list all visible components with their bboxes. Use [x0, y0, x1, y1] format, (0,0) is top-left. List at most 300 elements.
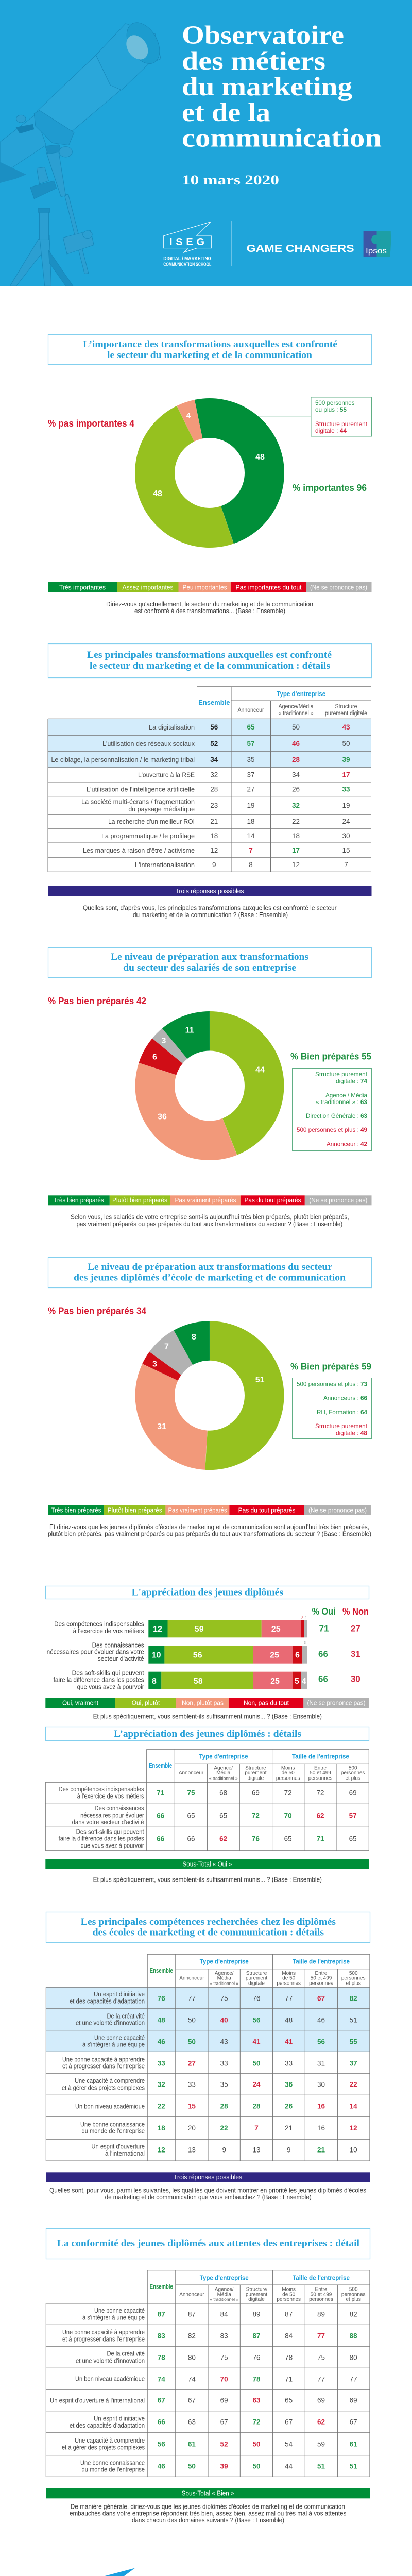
- heading: [48, 335, 372, 365]
- table header: purement: [246, 1976, 267, 1981]
- table rows: 75: [187, 1789, 195, 1797]
- table rows: 68: [219, 1789, 227, 1797]
- table rows: 72: [252, 2418, 261, 2426]
- table rows: 54: [285, 2441, 293, 2448]
- logo: ISEG: [163, 222, 212, 268]
- table header: Média: [217, 1976, 231, 1981]
- table rows: 52: [220, 2441, 228, 2448]
- heading: L’appréciation des jeunes diplômés : détails: [114, 1728, 301, 1739]
- table rows: 50: [292, 723, 300, 731]
- table rows: 20: [188, 2124, 196, 2132]
- callout: Structure purement: [315, 1071, 368, 1078]
- donut chart: 8: [192, 1333, 196, 1342]
- table: [46, 2270, 370, 2477]
- heading: [45, 1727, 369, 1740]
- bar: soft-skills: 25: [270, 1677, 280, 1686]
- table rows: 51: [350, 2462, 357, 2470]
- table rows: 22: [350, 2080, 357, 2088]
- table header: Ensemble: [198, 699, 230, 706]
- table rows: 14: [350, 2102, 357, 2110]
- table rows: 37: [247, 771, 255, 779]
- table rows: à l'international: [105, 2150, 145, 2157]
- table rows: 74: [158, 2375, 165, 2383]
- heading: L'appréciation des jeunes diplômés: [132, 1587, 283, 1598]
- note bar: Sous-Total « Bien »: [182, 2489, 234, 2497]
- legend: Plutôt bien préparés: [112, 1196, 167, 1204]
- table header: personnes: [277, 2297, 301, 2302]
- table rows: 18: [247, 818, 255, 825]
- question text: [48, 1523, 371, 1537]
- title: communication: [182, 124, 382, 152]
- callout: [293, 1069, 372, 1151]
- table rows: 62: [219, 1835, 227, 1842]
- table rows: Un esprit d'initiative: [94, 2415, 145, 2422]
- donut chart: 3: [152, 1360, 157, 1368]
- legend: Oui, vraiment: [62, 1699, 98, 1706]
- table rows: 24: [252, 2080, 261, 2088]
- table rows: 67: [285, 2418, 293, 2426]
- legend: Pas vraiment préparés: [168, 1506, 227, 1514]
- legend: Pas du tout préparés: [238, 1506, 296, 1514]
- table rows: [59, 1786, 357, 1849]
- table rows: 67: [350, 2418, 357, 2426]
- callout: digitale : 44: [315, 427, 347, 434]
- note bar: Trois réponses possibles: [175, 887, 244, 895]
- table header: Entre: [315, 2287, 328, 2293]
- table rows: et des capacités d'adaptation: [70, 2422, 145, 2429]
- table header: Ensemble: [150, 1967, 173, 1974]
- stacked bar chart: [47, 1617, 360, 1690]
- table rows: 78: [285, 2354, 293, 2362]
- table rows: 80: [350, 2354, 357, 2362]
- bar: compétences: à l'exercice de vos métiers: [73, 1627, 144, 1635]
- callout: digitale : 74: [336, 1078, 367, 1085]
- bar: compétences: [54, 1617, 360, 1637]
- table rows: 35: [247, 756, 255, 764]
- table rows: De la créativité: [107, 2350, 145, 2358]
- table rows: 87: [188, 2311, 196, 2318]
- table rows: 50: [252, 2462, 261, 2470]
- table rows: 48: [285, 2016, 293, 2024]
- table rows: 55: [350, 2038, 357, 2045]
- section 8: conformité aux attentes: [46, 2229, 370, 2524]
- table header: de 50: [282, 2292, 296, 2297]
- bar: compétences: 25: [271, 1625, 281, 1634]
- table header: Type d'entreprise: [200, 2274, 249, 2281]
- table rows: et une volonté d'innovation: [76, 2020, 145, 2027]
- legend: [48, 1505, 371, 1515]
- label: importantes: % importantes 96: [293, 483, 367, 493]
- table rows: 67: [220, 2418, 228, 2426]
- table rows: 52: [210, 740, 218, 748]
- table rows: 80: [188, 2354, 196, 2362]
- heading: Le niveau de préparation aux transformations du secteur: [88, 1262, 333, 1273]
- table rows: 65: [219, 1811, 227, 1819]
- table rows: et à progresser dans l'entreprise: [62, 2063, 145, 2070]
- table rows: du monde de l'entreprise: [81, 2128, 145, 2135]
- table rows: 41: [252, 2038, 261, 2045]
- header banner: [0, 0, 412, 286]
- table header: personnes: [277, 1980, 301, 1986]
- legend: Très importantes: [59, 583, 106, 591]
- table rows: 57: [247, 740, 255, 748]
- column head: oui: % Oui: [312, 1606, 336, 1617]
- question text: du marketing et de la communication ? (Base : Ensemble): [133, 911, 288, 919]
- legend: [45, 1698, 369, 1708]
- bar: connaissances: secteur d'activité: [98, 1655, 144, 1663]
- table rows: 65: [349, 1835, 357, 1842]
- title: des métiers: [182, 47, 325, 76]
- table rows: et à gérer des projets complexes: [62, 2084, 145, 2091]
- table rows: et des capacités d'adaptation: [70, 1998, 145, 2005]
- legend: Très bien préparés: [52, 1506, 101, 1514]
- table rows: 72: [252, 1811, 260, 1819]
- legend: Assez importantes: [123, 583, 174, 591]
- table rows: 69: [350, 2397, 357, 2404]
- table rows: 14: [247, 832, 255, 840]
- donut chart: 4: [186, 412, 191, 420]
- donut chart: [133, 1319, 286, 1472]
- table rows: 37: [350, 2059, 357, 2067]
- logo: Game Changers: GAME CHANGERS: [247, 243, 354, 255]
- table rows: Des compétences indispensables: [59, 1786, 144, 1793]
- table header: personnes: [276, 1775, 300, 1781]
- heading: [48, 644, 372, 678]
- bar: soft-skills: 8: [152, 1677, 157, 1686]
- table rows: 17: [342, 771, 350, 779]
- heading: des jeunes diplômés d’école de marketing et de communication: [74, 1273, 346, 1283]
- table rows: à l'exercice de vos métiers: [77, 1793, 144, 1800]
- heading: La conformité des jeunes diplômés aux attentes des entreprises : détail: [57, 2238, 359, 2249]
- heading: Les principales compétences recherchées chez les diplômés: [81, 1917, 336, 1927]
- table rows: Une bonne connaissance: [80, 2121, 145, 2128]
- table rows: 34: [292, 771, 300, 779]
- column head: non: % Non: [342, 1606, 369, 1617]
- table rows: 9: [287, 2146, 290, 2154]
- table header: [150, 1958, 366, 1986]
- table rows: et à gérer des projets complexes: [62, 2444, 145, 2451]
- table rows: 13: [252, 2146, 261, 2154]
- table header: et plus: [345, 1775, 360, 1781]
- table rows: 69: [220, 2397, 228, 2404]
- table header: personnes: [309, 1980, 333, 1986]
- table rows: 78: [158, 2354, 165, 2362]
- question text: Quelles sont, pour vous, parmi les suivantes, les qualités que doivent montrer en priorité les jeunes diplômés d'écoles: [49, 2186, 366, 2194]
- table rows: 78: [252, 2375, 261, 2383]
- legend: [48, 1195, 372, 1205]
- table rows: 30: [317, 2080, 325, 2088]
- table rows: 43: [342, 723, 350, 731]
- table rows: 71: [285, 2375, 293, 2383]
- heading: le secteur du marketing et de la communication : détails: [90, 660, 330, 671]
- legend: Peu importantes: [182, 583, 227, 591]
- table rows: 33: [188, 2080, 196, 2088]
- bar: compétences: 12: [153, 1625, 162, 1634]
- table rows: 66: [157, 1835, 165, 1842]
- table rows: L'utilisation de l'intelligence artificielle: [87, 786, 195, 793]
- table rows: 22: [220, 2124, 228, 2132]
- table rows: 71: [157, 1789, 165, 1797]
- table rows: 87: [285, 2311, 293, 2318]
- table header: Média: [217, 2292, 231, 2297]
- table rows: 70: [220, 2375, 228, 2383]
- bar: soft-skills: [54, 1669, 360, 1690]
- table rows: 83: [158, 2332, 165, 2340]
- question text: Quelles sont, d'après vous, les principales transformations auxquelles est confronté le secteur: [83, 904, 337, 912]
- table rows: à s'intégrer à une équipe: [82, 2041, 145, 2048]
- table header: « traditionnel »: [278, 710, 313, 717]
- table rows: De la créativité: [107, 2012, 145, 2020]
- table rows: 61: [188, 2441, 196, 2448]
- donut chart: 7: [164, 1343, 169, 1351]
- table header: Annonceur: [179, 1976, 204, 1981]
- callout: 500 personnes et plus : 49: [297, 1126, 367, 1133]
- table header: purement digitale: [325, 710, 367, 717]
- donut chart: 6: [152, 1053, 157, 1061]
- table rows: 57: [349, 1811, 357, 1819]
- table rows: 12: [158, 2146, 165, 2154]
- bar: connaissances: nécessaires pour évoluer dans votre: [47, 1648, 144, 1656]
- question text: Et plus spécifiquement, vous semblent-ils suffisamment munis... ? (Base : Ensemble): [93, 1712, 322, 1720]
- table rows: du paysage médiatique: [128, 806, 195, 813]
- table rows: 46: [317, 2016, 325, 2024]
- table header: de 50: [282, 1976, 296, 1981]
- table rows: Un esprit d'ouverture à l'international: [50, 2397, 145, 2404]
- table header: Média: [216, 1770, 231, 1776]
- label: pas bien préparés: % Pas bien préparés 42: [48, 996, 146, 1006]
- bar: soft-skills: 66: [318, 1674, 328, 1684]
- table: [45, 1749, 369, 1851]
- table rows: 24: [342, 818, 350, 825]
- table rows: 33: [220, 2059, 228, 2067]
- table rows: 66: [157, 1811, 165, 1819]
- question text: Selon vous, les salariés de votre entreprise sont-ils aujourd'hui très bien préparés, plutôt bien préparés,: [71, 1213, 349, 1221]
- table rows: 13: [188, 2146, 196, 2154]
- table rows: 50: [188, 2016, 196, 2024]
- table rows: 69: [317, 2397, 325, 2404]
- table rows: 15: [188, 2102, 196, 2110]
- table rows: 62: [317, 2418, 325, 2426]
- legend: Oui, plutôt: [132, 1699, 160, 1706]
- table header: personnes: [341, 2292, 366, 2297]
- table rows: 15: [342, 846, 350, 854]
- table rows: 36: [285, 2080, 293, 2088]
- table rows: 12: [292, 861, 300, 869]
- table rows: 72: [316, 1789, 324, 1797]
- table rows: 65: [187, 1811, 195, 1819]
- table rows: Une bonne capacité à apprendre: [62, 2056, 145, 2063]
- table rows: 18: [292, 832, 300, 840]
- logo: ISEG: [80, 2568, 136, 2576]
- table rows: 7: [249, 846, 253, 854]
- callout: Annonceurs : 66: [323, 1395, 367, 1402]
- table rows: 28: [252, 2102, 261, 2110]
- table rows: 22: [158, 2102, 165, 2110]
- partner logos: [80, 2568, 339, 2576]
- table header: digitale: [248, 1775, 264, 1781]
- legend: (Ne se prononce pas): [310, 583, 367, 591]
- section 1: importance des transformations: [48, 335, 372, 615]
- table rows: [62, 1991, 357, 2157]
- table header: 50 et 499: [311, 1976, 332, 1981]
- callout: Structure purement: [315, 420, 368, 428]
- table rows: 43: [220, 2038, 228, 2045]
- table rows: 22: [292, 818, 300, 825]
- table rows: 26: [292, 785, 300, 793]
- table rows: et à progresser dans l'entreprise: [62, 2335, 145, 2343]
- donut chart: 31: [157, 1422, 166, 1431]
- table rows: 67: [188, 2397, 196, 2404]
- table rows: 84: [220, 2311, 228, 2318]
- table rows: L'internationalisation: [135, 861, 195, 869]
- table header: Structure: [335, 704, 357, 710]
- table rows: 76: [252, 2354, 261, 2362]
- callout: digitale : 48: [336, 1429, 367, 1436]
- table header: « traditionnel »: [210, 1980, 238, 1986]
- table rows: 63: [188, 2418, 196, 2426]
- table rows: 39: [220, 2462, 228, 2470]
- note bar: [46, 2488, 370, 2498]
- logo: Ipsos: Ipsos: [366, 247, 387, 256]
- table rows: à s'intégrer à une équipe: [82, 2314, 145, 2321]
- table header: 500: [349, 1765, 357, 1771]
- question text: dans chacun des domaines suivants ? (Base : Ensemble): [132, 2516, 284, 2524]
- table rows: 19: [247, 802, 255, 809]
- table rows: 56: [252, 2016, 261, 2024]
- note bar: [48, 886, 372, 896]
- bar: soft-skills: faire la différence dans les postes: [54, 1676, 144, 1684]
- callout: « traditionnel » : 63: [316, 1098, 367, 1106]
- callout: [293, 1378, 372, 1438]
- bar: compétences: 71: [319, 1624, 329, 1634]
- bar: connaissances: 66: [318, 1649, 328, 1659]
- table header: Structure: [246, 1971, 267, 1976]
- legend: Pas vraiment préparés: [175, 1196, 236, 1204]
- table rows: 61: [350, 2441, 357, 2448]
- callout: 500 personnes et plus : 73: [297, 1381, 367, 1388]
- table rows: La société multi-écrans / fragmentation: [81, 799, 195, 806]
- table rows: 7: [344, 861, 348, 869]
- bar: connaissances: 10: [152, 1651, 161, 1660]
- title: et de la: [182, 98, 270, 127]
- callout: RH, Formation : 64: [317, 1409, 367, 1416]
- legend: Très bien préparés: [54, 1196, 104, 1204]
- table header: Structure: [245, 1765, 266, 1771]
- table rows: 75: [220, 1995, 228, 2003]
- icon: telescope: [0, 19, 166, 286]
- donut chart: 44: [255, 1065, 265, 1075]
- logo: ISEG: COMMUNICATION SCHOOL: [163, 262, 211, 268]
- table header: [198, 690, 367, 717]
- legend: Pas du tout préparés: [244, 1196, 301, 1204]
- title: Observatoire: [182, 21, 344, 50]
- heading: [48, 948, 372, 978]
- heading: du secteur des salariés de son entreprise: [123, 962, 296, 973]
- table header: digitale: [248, 1980, 265, 1986]
- table header: et plus: [346, 1980, 361, 1986]
- table rows: et une volonté d'innovation: [76, 2357, 145, 2364]
- note bar: [45, 1859, 369, 1869]
- heading: [46, 1912, 370, 1942]
- table header: purement: [245, 1770, 267, 1776]
- bar: connaissances: 25: [270, 1651, 279, 1660]
- table header: de 50: [282, 1770, 295, 1776]
- table rows: 8: [249, 861, 253, 869]
- question text: est confronté à des transformations... (Base : Ensemble): [134, 607, 285, 615]
- callout: Annonceur : 42: [327, 1141, 367, 1148]
- note bar: Trois réponses possibles: [174, 2173, 243, 2181]
- donut chart: 51: [255, 1376, 265, 1384]
- table rows: Une bonne connaissance: [80, 2459, 145, 2466]
- bar: soft-skills: que vous avez à pourvoir: [77, 1683, 144, 1690]
- table rows: 88: [350, 2332, 357, 2340]
- table rows: La recherche d'un meilleur ROI: [108, 818, 195, 825]
- donut chart: 36: [158, 1113, 167, 1121]
- table rows: Des connaissances: [95, 1805, 144, 1812]
- table rows: 40: [220, 2016, 228, 2024]
- logo: ISEG: ISEG: [169, 236, 204, 248]
- legend: Non, pas du tout: [244, 1699, 289, 1706]
- table rows: 76: [252, 1835, 260, 1842]
- table rows: 62: [316, 1811, 324, 1819]
- callout: Direction Générale : 63: [306, 1112, 367, 1120]
- table rows: Une capacité à comprendre: [75, 2077, 145, 2084]
- table rows: 89: [317, 2311, 325, 2318]
- table rows: 56: [210, 723, 218, 731]
- table header: Agence/: [215, 2287, 234, 2293]
- table header: Taille de l'entreprise: [292, 1752, 349, 1760]
- table header: Annonceur: [179, 2292, 204, 2297]
- table header: personnes: [309, 2297, 333, 2302]
- table rows: 12: [210, 846, 218, 854]
- heading: des écoles de marketing et de communication : détails: [93, 1927, 324, 1938]
- bar: connaissances: 56: [193, 1651, 202, 1660]
- table: [48, 687, 371, 872]
- bar: soft-skills: 5: [295, 1677, 299, 1686]
- table rows: 32: [210, 771, 218, 779]
- table rows: 77: [317, 2332, 325, 2340]
- label: pas bien préparés: % Pas bien préparés 34: [48, 1306, 146, 1316]
- table rows: 66: [158, 2418, 165, 2426]
- bar: compétences: 2: [305, 1617, 307, 1620]
- table rows: 69: [349, 1789, 357, 1797]
- table rows: 50: [188, 2038, 196, 2045]
- table rows: La programmatique / le profilage: [101, 833, 195, 840]
- table rows: 33: [158, 2059, 165, 2067]
- table rows: 71: [316, 1835, 324, 1842]
- table rows: Un bon niveau académique: [75, 2376, 145, 2383]
- table rows: 75: [317, 2354, 325, 2362]
- legend: [48, 582, 372, 592]
- donut chart: 48: [153, 489, 162, 498]
- table rows: 76: [158, 1995, 165, 2003]
- table rows: Une bonne capacité à apprendre: [62, 2329, 145, 2336]
- table rows: 46: [158, 2038, 165, 2045]
- table rows: [51, 723, 350, 869]
- table rows: 33: [285, 2059, 293, 2067]
- table rows: 18: [210, 832, 218, 840]
- bar: soft-skills: 30: [351, 1674, 360, 1684]
- table header: Taille de l'entreprise: [293, 2274, 350, 2281]
- table rows: 46: [292, 740, 300, 748]
- table rows: 30: [342, 832, 350, 840]
- table rows: 12: [350, 2124, 357, 2132]
- label: pas importantes: % pas importantes 4: [48, 418, 134, 429]
- bar: connaissances: [47, 1641, 360, 1664]
- table header: et plus: [346, 2297, 361, 2302]
- table rows: 16: [317, 2102, 325, 2110]
- table header: Ensemble: [150, 2283, 173, 2291]
